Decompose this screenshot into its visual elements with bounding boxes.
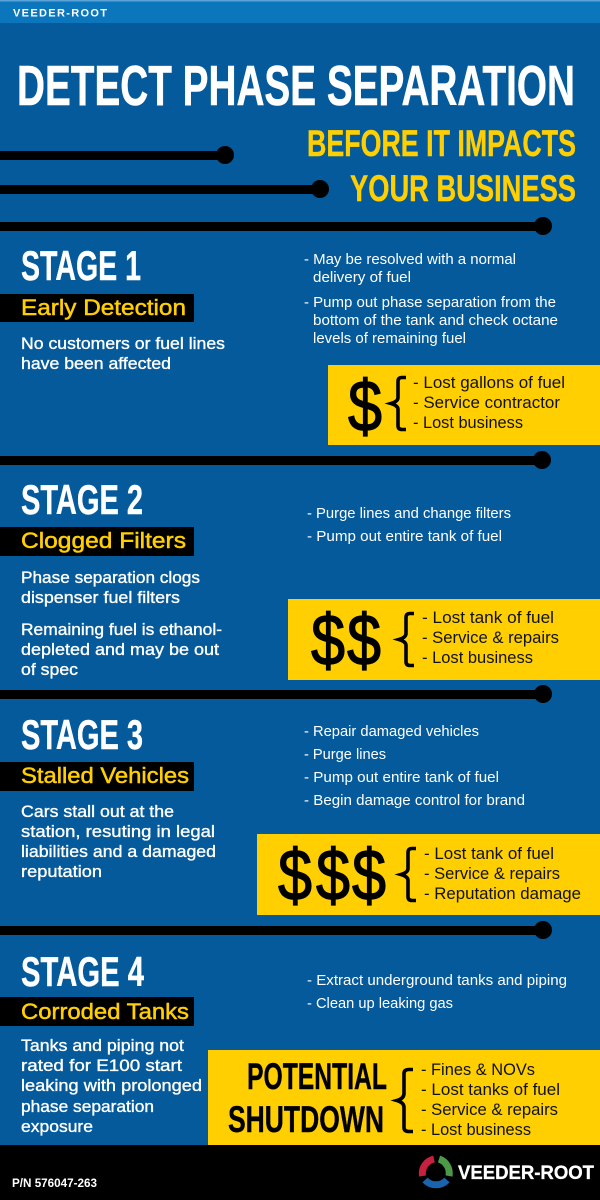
stage 3 actions (304, 724, 525, 809)
stage 2 description: Phase separation clogs (21, 569, 200, 587)
subtitle (307, 123, 576, 209)
stage 2 actions: - Purge lines and change filters (307, 506, 511, 522)
stage 4 label: Corroded Tanks (21, 999, 189, 1024)
stage 3 cost box (257, 834, 600, 916)
stage 1 cost box: - Lost gallons of fuel (413, 373, 565, 392)
timeline lines (0, 146, 552, 939)
stage 4 actions: - Clean up leaking gas (307, 996, 453, 1012)
stage 4 actions: - Extract underground tanks and piping (307, 973, 567, 989)
stage 3 heading: STAGE 3 (21, 711, 143, 758)
stage 1 cost box: - Lost business (413, 413, 523, 432)
panel: stage 1 (0, 242, 600, 447)
stage 2 cost box (288, 599, 600, 681)
stage 2 cost box: $ (311, 601, 345, 681)
stage 1 actions: delivery of fuel (313, 270, 411, 286)
stage 4 description: Tanks and piping not (21, 1037, 184, 1055)
stage 2 cost box: - Lost tank of fuel (422, 608, 554, 627)
stage 2 description: Remaining fuel is ethanol- (21, 621, 222, 639)
header bar (0, 0, 600, 23)
stage 4 description: rated for E100 start (21, 1057, 182, 1075)
stage 3 cost box: $ (278, 836, 312, 916)
stage 1 cost box: $ (348, 367, 382, 447)
stage 3 actions: - Pump out entire tank of fuel (304, 770, 499, 786)
stage 2 actions (307, 506, 511, 545)
stage 3 actions: - Begin damage control for brand (304, 793, 525, 809)
footer (0, 1145, 600, 1200)
stage 4 description (21, 1037, 202, 1136)
stage 2 label (0, 527, 194, 556)
stage 3 actions: - Repair damaged vehicles (304, 724, 479, 740)
stage 2 description: depleted and may be out (21, 641, 219, 659)
stage 3 cost box: $ (316, 836, 350, 916)
panel: stage 3 (0, 711, 600, 916)
stage 3 description (21, 803, 216, 881)
stage 4 description: phase separation (21, 1098, 154, 1116)
stage 2 description: of spec (21, 661, 78, 679)
stage 2 cost box: $ (347, 601, 381, 681)
stage 3 description: Cars stall out at the (21, 803, 174, 821)
stage 2 heading: STAGE 2 (21, 476, 143, 523)
stage 4 shutdown box: - Service & repairs (421, 1100, 558, 1119)
stage 2 cost box: - Service & repairs (422, 628, 559, 647)
stage 1 actions: - Pump out phase separation from the (304, 295, 556, 311)
stage 4 shutdown box: - Lost tanks of fuel (421, 1080, 560, 1099)
part number: P/N 576047-263 (12, 1176, 97, 1190)
stage 2 cost box: - Lost business (422, 648, 533, 667)
stage 4 shutdown box (208, 1050, 600, 1145)
stage 2 label: Clogged Filters (21, 528, 186, 553)
stage 1 description: No customers or fuel lines (21, 335, 225, 353)
stage 4 shutdown box: SHUTDOWN (228, 1099, 384, 1140)
stage 3 actions: - Purge lines (304, 747, 386, 763)
stage 3 cost box: - Reputation damage (424, 884, 581, 903)
stage 1 description (21, 335, 225, 373)
stage 1 label: Early Detection (21, 295, 186, 320)
stage 1 actions (304, 252, 558, 347)
stage 4 shutdown box: - Lost business (421, 1120, 531, 1139)
stage 3 label: Stalled Vehicles (21, 763, 189, 788)
stage 4 shutdown box: - Fines & NOVs (421, 1060, 535, 1079)
panel: stage 2 (0, 476, 600, 681)
stage 4 description: leaking with prolonged (21, 1077, 202, 1095)
stage 1 actions: - May be resolved with a normal (304, 252, 516, 268)
stage 2 description: dispenser fuel filters (21, 589, 180, 607)
stage 1 description: have been affected (21, 355, 171, 373)
stage 1 heading: STAGE 1 (21, 242, 141, 289)
brand name: VEEDER-ROOT (458, 1162, 594, 1184)
stage 3 description: liabilities and a damaged (21, 843, 216, 861)
stage 2 actions: - Pump out entire tank of fuel (307, 529, 502, 545)
icon: veeder-root logo (422, 1159, 449, 1185)
stage 3 description: reputation (21, 863, 102, 881)
stage 1 actions: levels of remaining fuel (313, 331, 466, 347)
header bar: VEEDER-ROOT (13, 8, 107, 20)
stage 3 description: station, resuting in legal (21, 823, 215, 841)
stage 3 cost box: - Service & repairs (424, 864, 560, 883)
stage 1 actions: bottom of the tank and check octane (313, 313, 558, 329)
stage 3 cost box: - Lost tank of fuel (424, 844, 554, 863)
panel: stage 4 (0, 948, 600, 1145)
stage 3 cost box: $ (352, 836, 386, 916)
stage 4 description: exposure (21, 1118, 93, 1136)
stage 4 shutdown box: POTENTIAL (247, 1056, 387, 1097)
stage 1 cost box (328, 365, 600, 447)
stage 2 description (21, 569, 222, 679)
stage 1 cost box: - Service contractor (413, 393, 560, 412)
stage 4 heading: STAGE 4 (21, 948, 144, 995)
stage 4 actions (307, 973, 567, 1012)
